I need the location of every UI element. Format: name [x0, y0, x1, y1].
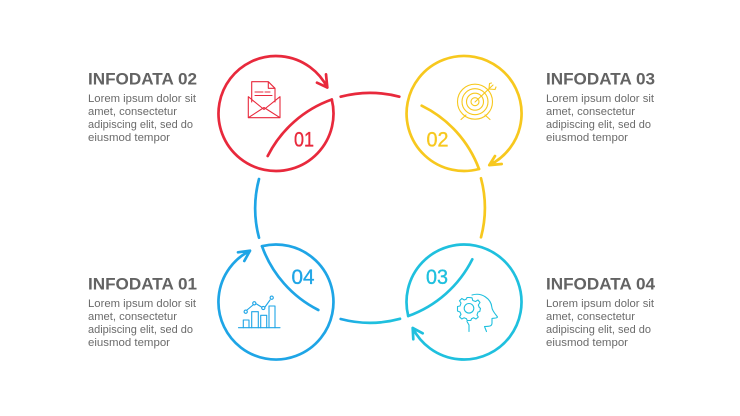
text block: INFODATA 02: Lorem ipsum dolor sit	[88, 93, 196, 105]
text block: INFODATA 03: eiusmod tempor	[546, 132, 628, 144]
text block: INFODATA 04: amet, consectetur	[546, 311, 635, 323]
text block: INFODATA 02	[88, 70, 197, 144]
text block: INFODATA 03: adipiscing elit, sed do	[546, 119, 651, 131]
icon: head with gear	[458, 294, 498, 332]
text block: INFODATA 01: INFODATA 01	[88, 274, 197, 294]
icon: bar chart	[238, 296, 280, 328]
step 04 circle: blue	[218, 245, 333, 360]
number 01: 01	[294, 128, 314, 152]
connector arc: blue	[255, 179, 259, 238]
leaf curve	[262, 246, 318, 310]
text block: INFODATA 01	[88, 274, 197, 349]
text block: INFODATA 03: Lorem ipsum dolor sit	[546, 93, 654, 105]
text block: INFODATA 04: adipiscing elit, sed do	[546, 324, 651, 336]
text block: INFODATA 03: INFODATA 03	[546, 70, 655, 88]
text block: INFODATA 01: Lorem ipsum dolor sit	[88, 298, 196, 310]
leaf curve	[408, 259, 472, 316]
leaf curve	[422, 106, 479, 169]
circle arc with arrow	[407, 56, 522, 171]
connector arc: cyan	[341, 319, 400, 323]
text block: INFODATA 01: amet, consectetur	[88, 311, 177, 323]
icon: target	[458, 83, 496, 120]
text block: INFODATA 04	[546, 274, 656, 349]
circle arc with arrow	[218, 245, 333, 360]
number 04: 04	[292, 266, 315, 289]
text block: INFODATA 03	[546, 70, 655, 144]
circle arc with arrow	[219, 56, 334, 171]
text block: INFODATA 01: eiusmod tempor	[88, 337, 170, 349]
text block: INFODATA 02: eiusmod tempor	[88, 132, 170, 144]
text block: INFODATA 03: amet, consectetur	[546, 106, 635, 118]
number 03: 03	[426, 266, 448, 289]
text block: INFODATA 04: INFODATA 04	[546, 274, 656, 294]
step 03 circle: cyan	[406, 244, 521, 359]
text block: INFODATA 04: Lorem ipsum dolor sit	[546, 298, 654, 310]
connector arc: red	[341, 93, 399, 97]
text block: INFODATA 04: eiusmod tempor	[546, 337, 628, 349]
text block: INFODATA 02: amet, consectetur	[88, 106, 177, 118]
step 01 circle: red	[219, 56, 334, 171]
text block: INFODATA 01: adipiscing elit, sed do	[88, 324, 193, 336]
icon: envelope	[248, 82, 280, 118]
connector arc: yellow	[481, 178, 485, 237]
text block: INFODATA 02: INFODATA 02	[88, 70, 197, 88]
circle arc with arrow	[406, 244, 521, 359]
text block: INFODATA 02: adipiscing elit, sed do	[88, 119, 193, 131]
step 02 circle: yellow	[407, 56, 522, 171]
number 02: 02	[426, 128, 448, 152]
leaf curve	[268, 100, 332, 156]
